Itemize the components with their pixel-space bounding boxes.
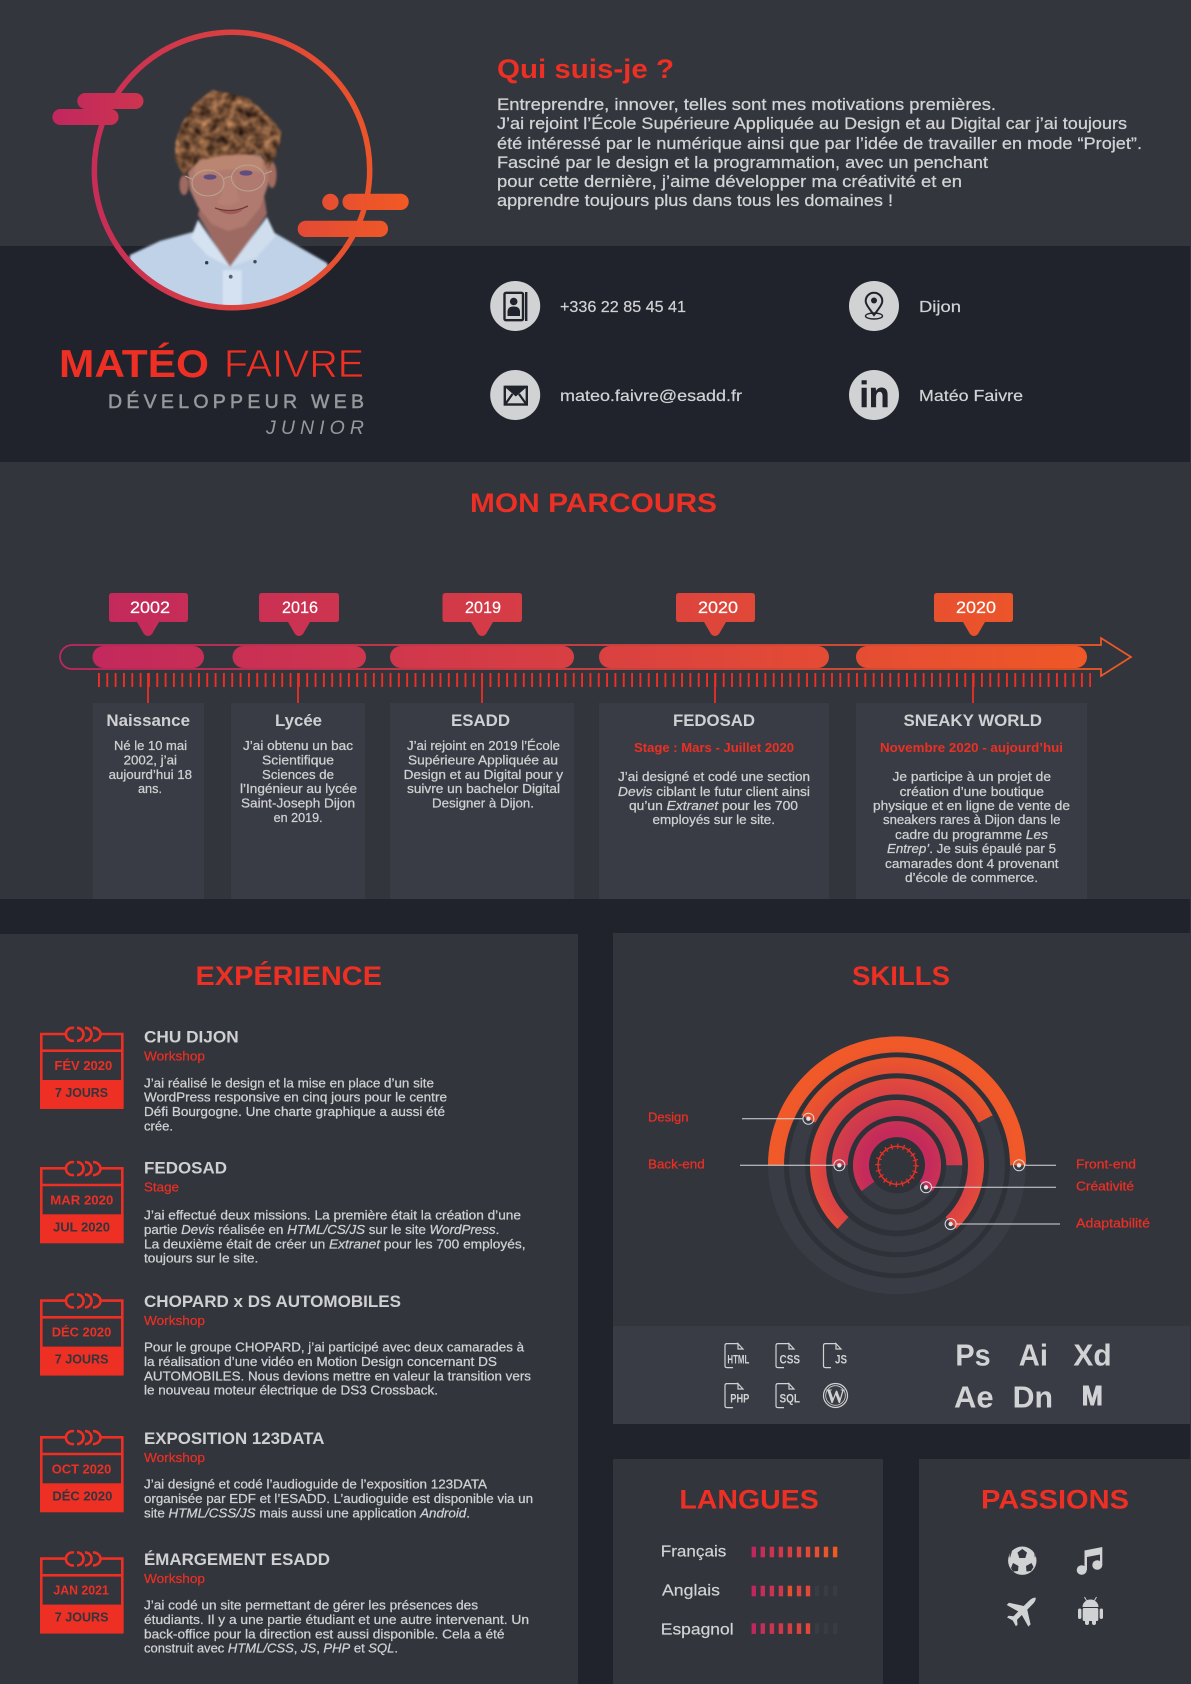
job: chu dijon [144,1028,447,1133]
web language file icons [725,1344,848,1408]
design tool logos: Xd [1073,1338,1112,1373]
radial skills chart [740,1036,1060,1294]
language: anglais [662,1583,837,1600]
calendar: oct-déc 2020: OCT 2020 [52,1461,111,1476]
card: lycée [231,703,365,899]
name: FAIVRE [224,343,364,386]
card: naissance [92,703,204,899]
job: chopard x ds automobiles: le nouveau moteur électrique de DS3 Crossback. [144,1384,438,1398]
job: exposition 123data: organisée par EDF et l’ESADD. L’audioguide est disponible via un [144,1492,533,1506]
calendar: fév 2020: FÉV 2020 [54,1058,112,1073]
web language file icons: JS [835,1354,847,1366]
timeline arrow [60,638,1131,676]
card: sneaky world: Entrep’. Je suis épaulé par 5 [887,842,1056,856]
job: émargement esadd: ÉMARGEMENT ESADD [144,1550,330,1569]
panel: expérience [0,934,578,1684]
card: naissance: Né le 10 mai [114,739,187,753]
contact: phone [490,281,686,331]
job: chu dijon: WordPress responsive en cinq jours pour le centre [144,1091,447,1105]
design tool logos: Dn [1013,1379,1053,1414]
design tool logos: Ae [954,1379,994,1414]
language: espagnol [661,1622,837,1639]
icon: music [1077,1547,1102,1575]
calendar: déc 2020: DÉC 2020 [52,1325,111,1340]
job: chopard x ds automobiles: Workshop [144,1313,205,1328]
contact: city [849,281,961,331]
floating pills [52,93,409,237]
job: chu dijon: Défi Bourgogne. Une charte graphique a aussi été [144,1105,445,1119]
icon: football [1008,1546,1036,1575]
job: chopard x ds automobiles: la réalisation d’une vidéo en Motion Design concernant DS [144,1355,497,1369]
job title: JUNIOR [265,417,364,439]
job title [108,390,364,439]
web language file icons: HTML [727,1354,749,1366]
web language file icons: SQL [780,1394,800,1406]
job: fedosad: FEDOSAD [144,1159,227,1178]
job: fedosad: La deuxième était de créer un Extranet pour les 700 employés, [144,1237,526,1251]
chart labels: Back-end [648,1156,705,1171]
card: fedosad: FEDOSAD [673,711,755,730]
card: fedosad: employés sur le site. [652,813,775,827]
intro text: apprendre toujours plus dans tous les domaines ! [497,192,893,210]
card: sneaky world: Novembre 2020 - aujourd’hui [880,741,1063,755]
card: naissance: ans. [138,782,162,796]
card: esadd: Designer à Dijon. [432,796,534,810]
chart labels: Design [648,1110,688,1125]
contact: email [490,370,743,420]
card: naissance: Naissance [106,711,190,730]
year tag 2019: 2019 [465,598,501,617]
job: chu dijon: CHU DIJON [144,1028,239,1047]
heading: mon parcours: MON PARCOURS [470,488,717,518]
card: esadd: J’ai rejoint en 2019 l’École [407,738,560,753]
contact: city: Dijon [919,299,961,316]
contact: email: mateo.faivre@esadd.fr [560,388,743,405]
card: sneaky world: SNEAKY WORLD [904,711,1042,730]
chart labels: Adaptabilité [1076,1215,1150,1230]
heading: langues: LANGUES [679,1484,819,1514]
contact: linkedin: Matéo Faivre [919,388,1023,405]
card: esadd [390,703,574,899]
calendar: jan 2021: 7 JOURS [55,1610,109,1625]
intro text: Entreprendre, innover, telles sont mes motivations premières. [497,96,996,114]
job: fedosad: Stage [144,1180,179,1195]
job: fedosad: partie Devis réalisée en HTML/CS/JS sur le site WordPress . [144,1223,499,1237]
right edge line [1190,0,1191,1684]
card: sneaky world: physique et en ligne de vente de [873,799,1070,813]
calendar: fév 2020: 7 JOURS [55,1085,108,1100]
intro text: J’ai rejoint l’École Supérieure Appliquée au Design et au Digital car j’ai toujours [497,114,1127,133]
card: esadd: ESADD [451,711,510,730]
icon: plane [1001,1587,1046,1633]
calendar: oct-déc 2020 [40,1431,124,1512]
job: émargement esadd: J’ai codé un site permettant de gérer les présences des [144,1599,478,1613]
job: exposition 123data: site HTML/CSS/JS mais aussi une application Android. [144,1506,470,1520]
calendar: déc 2020: 7 JOURS [55,1352,109,1367]
job: émargement esadd: construit avec HTML/CSS, JS, PHP et SQL. [144,1642,398,1656]
calendar: fév 2020 [40,1028,124,1109]
card: lycée: Scientifique [262,754,334,768]
card: fedosad: qu’un Extranet pour les 700 [629,799,798,813]
year tag 2020 sneaky world: 2020 [956,598,996,617]
job: émargement esadd: Workshop [144,1571,205,1586]
year tag 2020 fedosad: 2020 [698,598,738,617]
card: lycée: en 2019. [274,811,323,825]
web language file icons: PHP [730,1394,750,1406]
card: sneaky world: camarades dont 4 provenant [885,857,1059,871]
card: lycée: Lycée [275,711,322,730]
header band [0,0,1191,246]
tools strip [613,1326,1191,1424]
timeline ticks [98,673,1091,703]
job: émargement esadd [144,1550,529,1656]
contact: linkedin: in [860,374,890,415]
card: sneaky world: cadre du programme Les [895,828,1048,842]
year tag 2016 [259,593,339,636]
job: exposition 123data: EXPOSITION 123DATA [144,1429,324,1448]
chart labels: Créativité [1076,1178,1134,1193]
job: exposition 123data: Workshop [144,1450,205,1465]
card: sneaky world: sneakers rares à Dijon dans le [883,813,1061,827]
card: fedosad: Devis ciblant le futur client ainsi [618,785,810,799]
job title: DÉVELOPPEUR WEB [108,390,364,413]
job: chopard x ds automobiles: AUTOMOBILES. Nous devions mettre en valeur la transition vers [144,1369,531,1383]
gradient ring [94,32,370,308]
year tag 2020 sneaky world [934,593,1013,636]
calendar: jan 2021: JAN 2021 [53,1583,109,1598]
intro text: Fasciné par le design et la programmation, avec un penchant [497,154,988,172]
year tag 2016: 2016 [282,598,318,617]
card: naissance: 2002, j’ai [124,754,177,768]
year tag 2020 fedosad [676,593,755,636]
job: émargement esadd: étudiants. Il y a une partie étudiant et une autre intervenant. Un [144,1613,529,1627]
job: fedosad: J’ai effectué deux missions. La première était la création d’une [144,1209,521,1223]
card: sneaky world: d’école de commerce. [905,871,1038,885]
card: sneaky world [856,703,1087,899]
name: MATÉO [59,342,209,386]
heading: expérience: EXPÉRIENCE [196,960,382,991]
job: chu dijon: Workshop [144,1049,205,1064]
intro text: pour cette dernière, j’aime développer ma créativité et en [497,173,962,191]
card: esadd: suivre un bachelor Digital [407,782,560,796]
intro text [497,96,1142,210]
calendar: mar-jul 2020: JUL 2020 [53,1219,110,1234]
card: sneaky world: Je participe à un projet de [892,770,1051,784]
job: chu dijon: crée. [144,1119,173,1133]
calendar: déc 2020 [40,1294,124,1376]
design tool logos [954,1338,1112,1414]
job: chopard x ds automobiles [144,1292,531,1398]
card: lycée: l’Ingénieur au lycée [240,782,357,796]
hair [175,90,282,176]
calendar: oct-déc 2020: DÉC 2020 [52,1488,112,1503]
contact: phone: +336 22 85 45 41 [560,299,686,316]
language: espagnol: Espagnol [661,1622,734,1639]
card: fedosad: J’ai designé et codé une section [618,770,810,784]
job: chopard x ds automobiles: CHOPARD x DS AUTOMOBILES [144,1292,401,1311]
card: esadd: Design et au Digital pour y [404,768,564,782]
year tag 2002: 2002 [130,598,170,617]
card: esadd: Supérieure Appliquée au [408,754,558,768]
language: français [661,1544,837,1561]
web language file icons: W [826,1386,845,1408]
heading: skills: SKILLS [852,961,950,991]
chart labels: Front-end [1076,1156,1136,1171]
language: anglais: Anglais [662,1583,720,1600]
year tag 2019 [442,593,522,636]
language: français: Français [661,1544,726,1561]
job: chu dijon: J’ai réalisé le design et la mise en place d’un site [144,1076,434,1090]
job: chopard x ds automobiles: Pour le groupe CHOPARD, j’ai participé avec deux camarades à [144,1341,524,1355]
calendar: jan 2021 [40,1552,124,1634]
heading: qui suis-je: Qui suis-je ? [497,54,674,84]
panel: langues [613,1459,883,1684]
calendar: mar-jul 2020 [40,1162,124,1243]
job: fedosad: toujours sur le site. [144,1252,258,1266]
job: exposition 123data [144,1429,533,1520]
panel: passions [919,1459,1191,1684]
card: sneaky world: création d’une boutique [900,785,1044,799]
card: fedosad [599,703,829,899]
name [59,342,364,386]
design tool logos: Ai [1019,1338,1048,1373]
card: fedosad: Stage : Mars - Juillet 2020 [634,741,794,755]
web language file icons: CSS [780,1354,800,1366]
contact: linkedin [849,370,1023,420]
job: fedosad [144,1159,526,1266]
chart labels [648,1110,1150,1230]
timeline period bars [92,646,1087,668]
job: exposition 123data: J’ai designé et codé l’audioguide de l’exposition 123DATA [144,1478,488,1492]
panel: skills [613,933,1191,1424]
intro text: été intéressé par le numérique ainsi que par l’idée de travailler en mode “Projet”. [497,135,1142,153]
heading: passions: PASSIONS [981,1484,1129,1514]
card: lycée: Sciences de [262,768,334,782]
design tool logos: M [1082,1380,1103,1411]
card: lycée: J’ai obtenu un bac [243,739,353,753]
job: émargement esadd: back-office pour la direction est aussi disponible. Cela a été [144,1627,505,1641]
card: naissance: aujourd’hui 18 [109,768,192,782]
icon: android [1078,1597,1103,1625]
design tool logos: Ps [955,1338,991,1373]
profile photo [128,89,329,305]
card: lycée: Saint-Joseph Dijon [241,796,355,810]
timeline band [0,462,1191,899]
year tag 2002 [109,593,188,636]
calendar: mar-jul 2020: MAR 2020 [50,1192,113,1207]
